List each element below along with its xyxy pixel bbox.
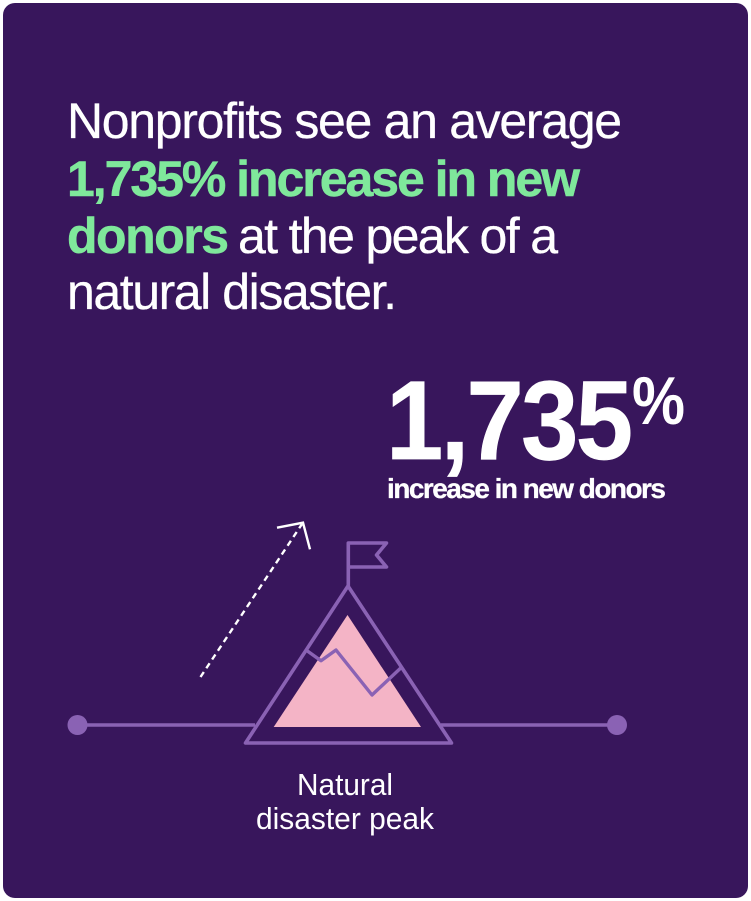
mountain outline xyxy=(246,586,452,743)
title xyxy=(67,93,622,320)
ridge line xyxy=(306,650,401,695)
statistic number: 1,735 xyxy=(386,357,633,483)
peak label: Natural xyxy=(297,768,393,802)
title: natural disaster. xyxy=(67,264,397,320)
peak label xyxy=(256,768,435,836)
statistic caption: increase in new donors xyxy=(387,473,666,504)
peak label: disaster peak xyxy=(256,802,435,836)
timeline xyxy=(68,715,627,735)
flag xyxy=(348,543,386,586)
icon: mountain with flag xyxy=(246,543,452,743)
title: Nonprofits see an average xyxy=(67,93,622,149)
title: at the peak of a xyxy=(238,208,558,264)
title: donors xyxy=(67,208,229,264)
percent sign: % xyxy=(632,363,685,439)
pink mountain xyxy=(274,615,421,727)
icon: dashed rising arrow xyxy=(200,523,310,677)
big statistic xyxy=(386,357,685,504)
title: 1,735% increase in new xyxy=(67,151,580,207)
